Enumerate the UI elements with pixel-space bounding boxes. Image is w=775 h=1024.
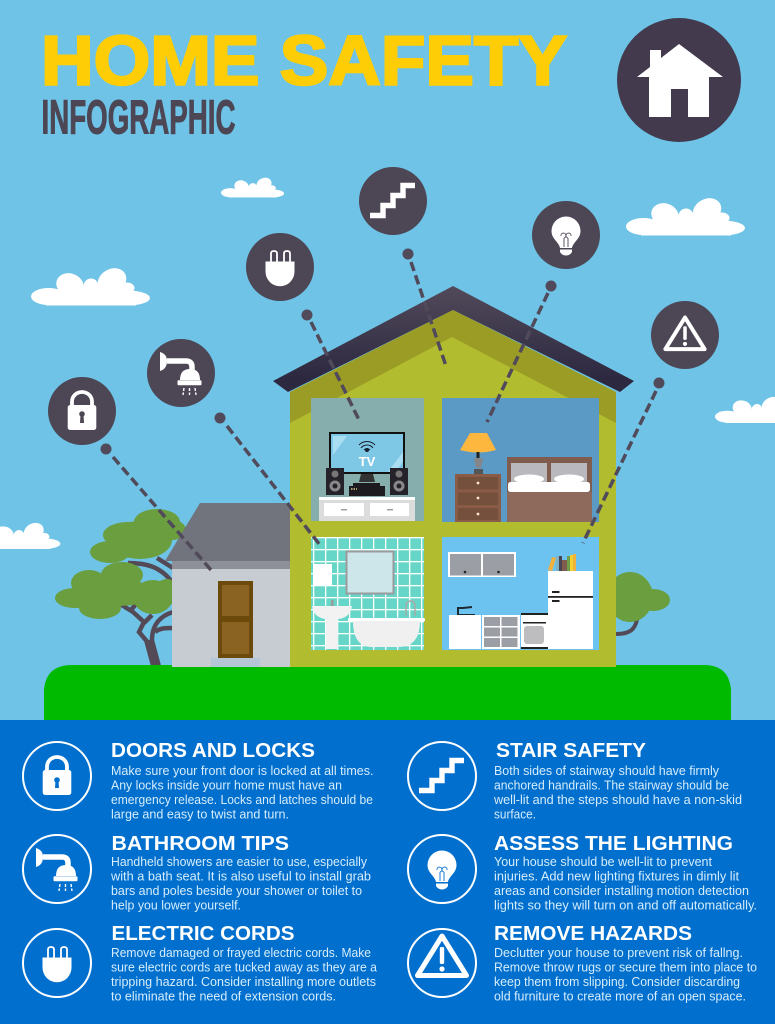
body text: Any locks inside yourr home must have an	[111, 778, 342, 792]
body text	[494, 946, 757, 1004]
stove	[521, 613, 548, 649]
heading: BATHROOM TIPS	[112, 833, 289, 855]
sink cabinet	[449, 615, 481, 649]
body text	[111, 946, 377, 1004]
icon: bulb	[408, 835, 476, 903]
body text: areas and consider installing motion detection	[494, 884, 749, 898]
body text: help you lower yourself.	[111, 898, 241, 912]
body text: Make sure your front door is locked at all times.	[111, 764, 374, 778]
tip: hazards	[408, 923, 757, 1004]
heading: REMOVE HAZARDS	[494, 923, 692, 945]
icon: warning badge	[651, 301, 719, 369]
tap	[458, 607, 475, 615]
tv: TV	[359, 454, 376, 469]
tip: doors and locks	[23, 740, 374, 822]
heading: ASSESS THE LIGHTING	[494, 833, 733, 855]
icon: stairs badge	[359, 167, 427, 235]
heading: ELECTRIC CORDS	[112, 923, 294, 945]
body text: emergency release. Locks and latches should be	[111, 793, 373, 807]
body text: to eliminate the need of extension cords.	[111, 990, 336, 1004]
tip: stair safety	[408, 740, 742, 822]
body text	[494, 855, 757, 912]
tv cabinet	[319, 497, 415, 521]
icon: shower badge	[147, 339, 215, 407]
fridge	[548, 571, 593, 649]
room: bedroom	[442, 398, 599, 522]
title: HOME SAFETY	[41, 22, 567, 100]
body text: large and easy to twist and turn.	[111, 808, 289, 822]
icon: shower	[23, 835, 91, 903]
small annex house	[165, 503, 290, 667]
icon: plug	[23, 929, 91, 997]
connector: hazards	[583, 378, 664, 543]
body text: lights so they will turn on and off automatically.	[494, 898, 757, 912]
icon: lock	[23, 742, 91, 810]
bed	[507, 457, 592, 522]
ground	[44, 665, 731, 720]
tip: electric cords	[23, 923, 377, 1004]
room: bathroom	[311, 537, 425, 650]
main house	[273, 286, 634, 667]
subtitle: INFOGRAPHIC	[42, 92, 236, 144]
body text: injuries. Add new lighting fixtures in dimly lit	[494, 870, 739, 884]
bathtub	[348, 601, 425, 647]
mirror	[346, 552, 394, 594]
body text: Remove damaged or frayed electric cords. Make	[111, 946, 371, 960]
body text	[111, 764, 374, 822]
body text: sure electric cords are tucked away as they are a	[111, 960, 377, 974]
body text	[493, 764, 742, 822]
icon: home badge	[617, 18, 741, 142]
drawers	[482, 615, 520, 649]
tip: lighting	[408, 833, 757, 912]
nightstand	[455, 474, 501, 522]
body text: Remove throw rugs or secure them into place to	[494, 960, 757, 974]
body text: Your house should be well-lit to prevent	[494, 855, 712, 869]
connector: stairs	[402, 248, 446, 366]
left tree	[55, 509, 186, 666]
wall cabinets	[448, 552, 516, 577]
room: kitchen	[442, 537, 599, 650]
heading: DOORS AND LOCKS	[111, 740, 315, 762]
body text	[110, 855, 371, 912]
body text: well-lit and the steps should have a non-skid	[493, 793, 742, 807]
sink	[312, 600, 352, 649]
house body	[290, 310, 616, 667]
body text: Handheld showers are easier to use, especially	[111, 855, 368, 869]
tip: bathroom	[23, 833, 371, 912]
clouds	[0, 175, 775, 549]
icon: stairs	[408, 742, 476, 810]
body text: surface.	[494, 808, 536, 822]
body text: Declutter your house to prevent risk of fallng.	[494, 946, 743, 960]
body text: with a bath seat. It is also useful to install grab	[110, 870, 371, 884]
door	[218, 581, 253, 658]
speakers and receiver	[326, 468, 408, 496]
body text: anchored handrails. The stairway should be	[494, 778, 729, 792]
connector: bathroom	[214, 412, 320, 545]
body text: old furniture to create more of an open space.	[494, 990, 746, 1004]
body text: tripping hazard. Consider installing more outlets	[111, 975, 376, 989]
attic shadow band	[290, 310, 616, 423]
icon: plug badge	[246, 233, 314, 301]
body text: Both sides of stairway should have firmly	[494, 764, 720, 778]
body text: keep them from slipping. Consider discarding	[494, 975, 740, 989]
lamp	[460, 433, 496, 474]
body text: bars and poles beside your shower or toilet to	[111, 884, 362, 898]
right tree	[607, 572, 670, 634]
towel	[313, 564, 332, 586]
books	[548, 554, 576, 571]
connector: doors and locks	[100, 444, 211, 570]
heading: STAIR SAFETY	[496, 740, 647, 762]
connector: lighting	[487, 280, 556, 422]
icon: lock badge	[48, 377, 116, 445]
icon: warning	[408, 929, 476, 997]
panel: safety tips	[0, 720, 775, 1024]
icon: bulb badge	[532, 201, 600, 269]
room: living room	[311, 398, 424, 521]
roof	[273, 286, 634, 392]
connector: electric	[302, 310, 360, 422]
